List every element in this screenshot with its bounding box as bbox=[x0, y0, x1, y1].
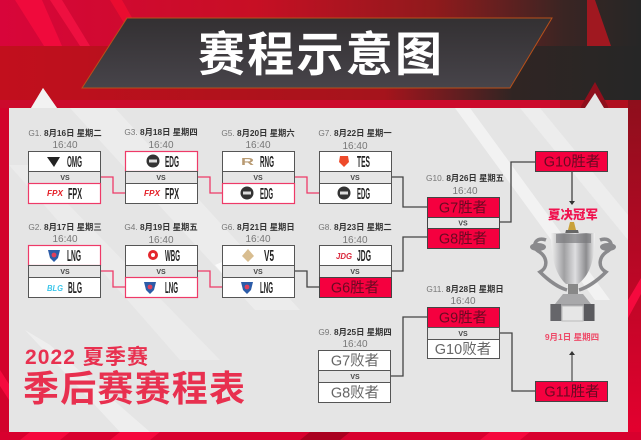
arrow: G11 winner to date bbox=[569, 351, 575, 381]
match G6 bbox=[221, 222, 295, 298]
match G7: 16:40 bbox=[342, 141, 368, 152]
title: 赛程示意图 bbox=[198, 28, 442, 81]
match G5: EDG bbox=[260, 186, 273, 203]
match G9: G9. 8月25日 星期四 bbox=[318, 327, 392, 337]
match G1 bbox=[28, 128, 102, 204]
match G11: G11. 8月28日 星期日 bbox=[426, 284, 504, 294]
match G10 bbox=[426, 173, 504, 248]
match G10: G10. 8月26日 星期五 bbox=[426, 173, 504, 183]
box: G10 winner bbox=[536, 152, 608, 172]
match G7 bbox=[318, 128, 392, 204]
match G9: VS bbox=[350, 374, 360, 381]
match G11 bbox=[426, 284, 504, 358]
match G2: VS bbox=[60, 269, 70, 276]
match G5: G5. 8月20日 星期六 bbox=[221, 128, 295, 138]
match G2: G2. 8月17日 星期三 bbox=[28, 222, 102, 232]
match G1: OMG bbox=[67, 154, 82, 171]
match G2: LNG bbox=[67, 248, 81, 265]
match G8: G8. 8月23日 星期二 bbox=[318, 222, 392, 232]
match G2: BLG bbox=[68, 280, 82, 297]
match G10: 16:40 bbox=[452, 186, 478, 197]
match G9 bbox=[318, 327, 392, 402]
match G4: VS bbox=[156, 269, 166, 276]
heading: 2022 summer: 2022 夏季赛 bbox=[25, 345, 148, 369]
match G10: VS bbox=[458, 220, 468, 228]
match G11: 16:40 bbox=[450, 296, 476, 307]
box: G10 winner: G10胜者 bbox=[544, 154, 600, 170]
match G1: FPX bbox=[47, 189, 64, 198]
match G3: EDG bbox=[165, 154, 179, 171]
match G10: G7胜者 bbox=[439, 200, 487, 216]
match G6: V5 bbox=[264, 248, 274, 265]
match G1: VS bbox=[60, 175, 70, 182]
match G2: BLG bbox=[47, 284, 63, 293]
match G4: LNG bbox=[165, 280, 178, 297]
match G6: 16:40 bbox=[245, 234, 271, 245]
match G6: G6. 8月21日 星期日 bbox=[221, 222, 295, 232]
match G5: RNG bbox=[260, 154, 274, 171]
connector lines bbox=[101, 162, 536, 391]
match G4 bbox=[124, 222, 198, 298]
match G4: G4. 8月19日 星期五 bbox=[124, 222, 198, 232]
match G11: G9胜者 bbox=[439, 310, 487, 326]
match G3: FPX bbox=[165, 186, 179, 203]
match G8: VS bbox=[350, 269, 360, 276]
match G4: 16:40 bbox=[148, 235, 174, 246]
title banner bbox=[82, 18, 552, 88]
match G9: G7败者 bbox=[331, 352, 379, 370]
match G6: VS bbox=[253, 269, 263, 276]
match G6: LNG bbox=[260, 280, 273, 297]
match G4: WBG bbox=[165, 248, 180, 265]
match G2: 16:40 bbox=[52, 234, 78, 245]
match G5: 16:40 bbox=[245, 140, 271, 151]
arrow: G10 winner to trophy bbox=[569, 172, 575, 205]
match G11: G10败者 bbox=[435, 341, 491, 358]
match G5: R bbox=[241, 157, 255, 168]
match G3 bbox=[124, 127, 198, 204]
match G9: 16:40 bbox=[342, 339, 368, 350]
date: finals: 9月1日 星期四 bbox=[545, 332, 599, 342]
heading: playoffs schedule: 季后赛赛程表 bbox=[23, 368, 245, 409]
match G7: G7. 8月22日 星期一 bbox=[318, 128, 392, 138]
heading: finals: 夏决冠军 bbox=[548, 207, 598, 222]
box: G11 winner: G11胜者 bbox=[544, 384, 600, 400]
match G10: G8胜者 bbox=[439, 230, 487, 248]
match G7: EDG bbox=[357, 186, 370, 203]
match G11: VS bbox=[458, 331, 468, 338]
match G7: VS bbox=[350, 175, 360, 182]
match G3: FPX bbox=[144, 189, 161, 198]
match G8: JDG bbox=[357, 248, 371, 265]
match G1: FPX bbox=[68, 186, 82, 203]
icon: trophy bbox=[530, 222, 616, 321]
match G7: TES bbox=[357, 154, 370, 171]
match G5 bbox=[221, 128, 295, 204]
match G8: 16:40 bbox=[342, 235, 368, 246]
match G1: G1. 8月16日 星期二 bbox=[28, 128, 102, 138]
match G8 bbox=[318, 222, 392, 298]
match G9: G8败者 bbox=[331, 384, 379, 402]
panel: schedule bbox=[9, 82, 628, 432]
match G3: G3. 8月18日 星期四 bbox=[124, 127, 198, 137]
match G8: JDG bbox=[336, 252, 352, 261]
match G3: VS bbox=[156, 175, 166, 182]
match G8: G6胜者 bbox=[331, 280, 379, 296]
match G5: VS bbox=[253, 175, 263, 182]
match G1: 16:40 bbox=[52, 140, 78, 151]
match G3: 16:40 bbox=[148, 140, 174, 151]
box: G11 winner bbox=[536, 382, 608, 402]
match G2 bbox=[28, 222, 102, 298]
